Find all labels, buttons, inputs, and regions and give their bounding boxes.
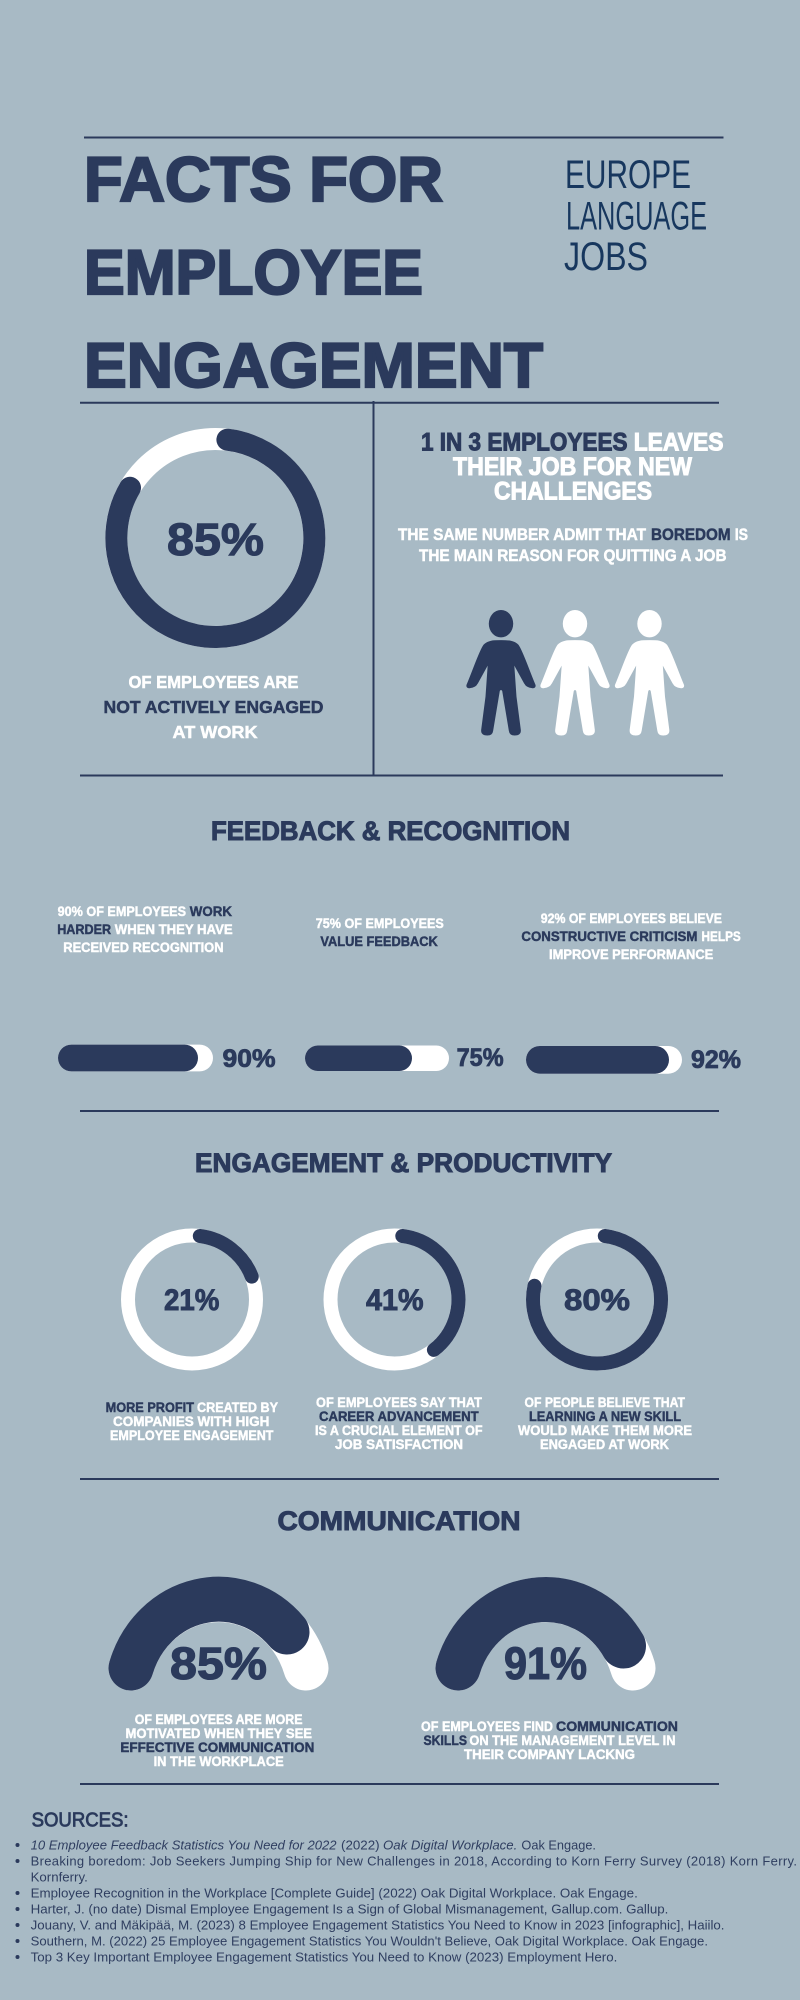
text: boredom: BOREDOM	[651, 526, 731, 544]
caption: career advancement: CAREER ADVANCEMENT	[319, 1409, 479, 1424]
source list: 10 Employee Feedback Statistics You Need for 2022	[31, 1837, 337, 1852]
source list	[31, 1837, 797, 1964]
text: boredom: THE SAME NUMBER ADMIT THAT	[398, 526, 646, 544]
title: EMPLOYEE	[84, 238, 423, 308]
text: work harder: HARDER	[57, 922, 111, 937]
progress bar: 75%	[305, 1044, 504, 1072]
text: work harder: 90% OF EMPLOYEES	[58, 904, 186, 919]
text: work harder: WORK	[190, 904, 232, 919]
text: boredom: THE MAIN REASON FOR QUITTING A JOB	[419, 547, 727, 565]
text: boredom	[398, 526, 748, 565]
caption: career advancement: JOB SATISFACTION	[335, 1437, 463, 1452]
icon: person white	[541, 610, 609, 735]
source list: Jouany, V. and Mäkipää, M. (2023) 8 Employee Engagement Statistics You Need to Know in 2023 [infographic], Haiilo.	[31, 1917, 725, 1932]
source list: Oak Engage.	[521, 1837, 596, 1852]
source list: (2022)	[341, 1837, 380, 1852]
logo: Europe Language Jobs: JOBS	[564, 235, 648, 279]
source list: Harter, J. (no date) Dismal Employee Engagement Is a Sign of Global Mismanagement, Gallup.com. Gallup.	[31, 1901, 668, 1916]
heading: sources: SOURCES:	[32, 1810, 129, 1832]
caption: career advancement: IS A CRUCIAL ELEMENT OF	[315, 1423, 483, 1438]
text: value feedback: 75% OF EMPLOYEES	[316, 916, 444, 931]
text: constructive criticism: HELPS	[702, 929, 741, 944]
donut chart: 41%: 41%	[366, 1284, 424, 1317]
logo: Europe Language Jobs: LANGUAGE	[566, 194, 707, 238]
caption: learning a new skill: LEARNING A NEW SKILL	[529, 1409, 681, 1424]
panel: 80% learning a new skill	[518, 1236, 692, 1452]
text: constructive criticism: 92% OF EMPLOYEES BELIEVE	[541, 911, 722, 926]
gauge chart: 91%: 91%	[504, 1638, 587, 1689]
donut chart: 85%: 85%	[167, 514, 264, 565]
caption: more profit: EMPLOYEE ENGAGEMENT	[110, 1428, 274, 1443]
panel: 85% motivated	[120, 1599, 314, 1769]
text: work harder: WHEN THEY HAVE	[115, 922, 233, 937]
caption: learning a new skill	[518, 1395, 692, 1452]
caption: communication skills lacking: SKILLS	[424, 1733, 467, 1748]
gauge chart: 91%	[458, 1600, 633, 1689]
text: constructive criticism: IMPROVE PERFORMANCE	[549, 947, 713, 962]
source list: Top 3 Key Important Employee Engagement Statistics You Need to Know (2023) Employment Hero.	[31, 1949, 617, 1964]
heading: 1 in 3 employees leave: LEAVES	[634, 428, 724, 456]
caption: communication skills lacking: THEIR COMPANY LACKNG	[464, 1747, 635, 1762]
donut chart: 80%: 80%	[564, 1284, 630, 1317]
text: constructive criticism: CONSTRUCTIVE CRITICISM	[521, 929, 697, 944]
logo: Europe Language Jobs	[564, 153, 707, 279]
text: work harder	[57, 904, 233, 955]
progress bar: 92%: 92%	[691, 1046, 741, 1074]
progress bar: 92%	[526, 1046, 741, 1074]
icon: three people	[467, 610, 684, 735]
panel: 85% not actively engaged	[104, 439, 324, 742]
title: FACTS FOR	[84, 145, 443, 215]
caption: learning a new skill: OF PEOPLE BELIEVE THAT	[524, 1395, 686, 1410]
panel: 21% more profit	[106, 1236, 278, 1443]
source list: Southern, M. (2022) 25 Employee Engagement Statistics You Wouldn't Believe, Oak Digital Workplace. Oak Engage.	[31, 1933, 708, 1948]
caption: effective communication: IN THE WORKPLACE	[154, 1754, 284, 1769]
caption: more profit	[106, 1400, 278, 1443]
panel: 1 in 3 employees	[398, 428, 748, 735]
heading: 1 in 3 employees leave: 1 IN 3 EMPLOYEES	[421, 428, 628, 456]
caption: effective communication	[120, 1712, 314, 1769]
heading: 1 in 3 employees leave: THEIR JOB FOR NEW	[453, 453, 692, 481]
title	[84, 145, 543, 401]
text: value feedback: VALUE FEEDBACK	[320, 934, 438, 949]
icon: person white	[615, 610, 684, 735]
caption: not actively engaged: NOT ACTIVELY ENGAGED	[104, 697, 324, 717]
icon: person dark	[467, 610, 535, 735]
caption: more profit: COMPANIES WITH HIGH	[113, 1414, 269, 1429]
heading: 1 in 3 employees leave: CHALLENGES	[494, 478, 652, 506]
logo: Europe Language Jobs: EUROPE	[565, 153, 691, 197]
caption: communication skills lacking: COMMUNICATION	[556, 1719, 678, 1734]
donut chart: 21%	[128, 1236, 256, 1364]
text: work harder: RECEIVED RECOGNITION	[63, 940, 223, 955]
caption: learning a new skill: WOULD MAKE THEM MORE	[518, 1423, 692, 1438]
heading: communication: COMMUNICATION	[278, 1506, 520, 1536]
heading: feedback and recognition: FEEDBACK & RECOGNITION	[211, 816, 570, 846]
caption: more profit: MORE PROFIT	[106, 1400, 195, 1415]
source list: Oak Digital Workplace.	[383, 1837, 517, 1852]
caption: effective communication: OF EMPLOYEES ARE MORE	[135, 1712, 302, 1727]
gauge chart: 85%	[131, 1599, 306, 1689]
title: ENGAGEMENT	[84, 331, 543, 401]
panel: feedback stat 75%	[305, 916, 504, 1072]
panel: 41% career advancement	[315, 1236, 483, 1452]
gauge chart: 85%: 85%	[170, 1638, 267, 1689]
source list: Employee Recognition in the Workplace [Complete Guide] (2022) Oak Digital Workplace. Oak Engage.	[31, 1885, 638, 1900]
donut chart: 21%: 21%	[164, 1284, 219, 1317]
caption: not actively engaged: AT WORK	[172, 722, 258, 742]
caption: communication skills lacking	[421, 1719, 678, 1762]
progress bar: 90%: 90%	[222, 1045, 276, 1073]
caption: not actively engaged: OF EMPLOYEES ARE	[128, 672, 298, 692]
panel: feedback stat 92%	[521, 911, 741, 1074]
panel: sources	[16, 1810, 797, 1964]
progress bar: 90%	[58, 1045, 276, 1073]
text: value feedback	[316, 916, 444, 949]
heading: 1 in 3 employees leave	[421, 428, 724, 506]
caption: more profit: CREATED BY	[197, 1400, 278, 1415]
caption: communication skills lacking: ON THE MANAGEMENT LEVEL IN	[469, 1733, 676, 1748]
text: constructive criticism	[521, 911, 741, 962]
list bullets	[16, 1843, 20, 1959]
caption: effective communication: MOTIVATED WHEN THEY SEE	[126, 1726, 312, 1741]
donut chart: 80%	[533, 1236, 661, 1364]
text: boredom: IS	[735, 526, 748, 544]
caption: effective communication: EFFECTIVE COMMUNICATION	[120, 1740, 314, 1755]
source list: Kornferry.	[31, 1869, 88, 1884]
caption: communication skills lacking: OF EMPLOYEES FIND	[421, 1719, 553, 1734]
caption: learning a new skill: ENGAGED AT WORK	[540, 1437, 669, 1452]
donut chart: 41%	[330, 1236, 458, 1364]
donut chart: 85%	[116, 439, 314, 637]
source list: Breaking boredom: Job Seekers Jumping Ship for New Challenges in 2018, According to Korn Ferry Survey (2018) Korn Ferry.	[31, 1853, 797, 1868]
panel: 91% communication skills	[421, 1600, 678, 1762]
caption: career advancement	[315, 1395, 483, 1452]
caption: career advancement: OF EMPLOYEES SAY THAT	[316, 1395, 483, 1410]
panel: feedback stat 90%	[57, 904, 276, 1073]
caption: not actively engaged	[104, 672, 324, 742]
heading: engagement and productivity: ENGAGEMENT & PRODUCTIVITY	[195, 1148, 612, 1178]
progress bar: 75%: 75%	[457, 1044, 504, 1072]
